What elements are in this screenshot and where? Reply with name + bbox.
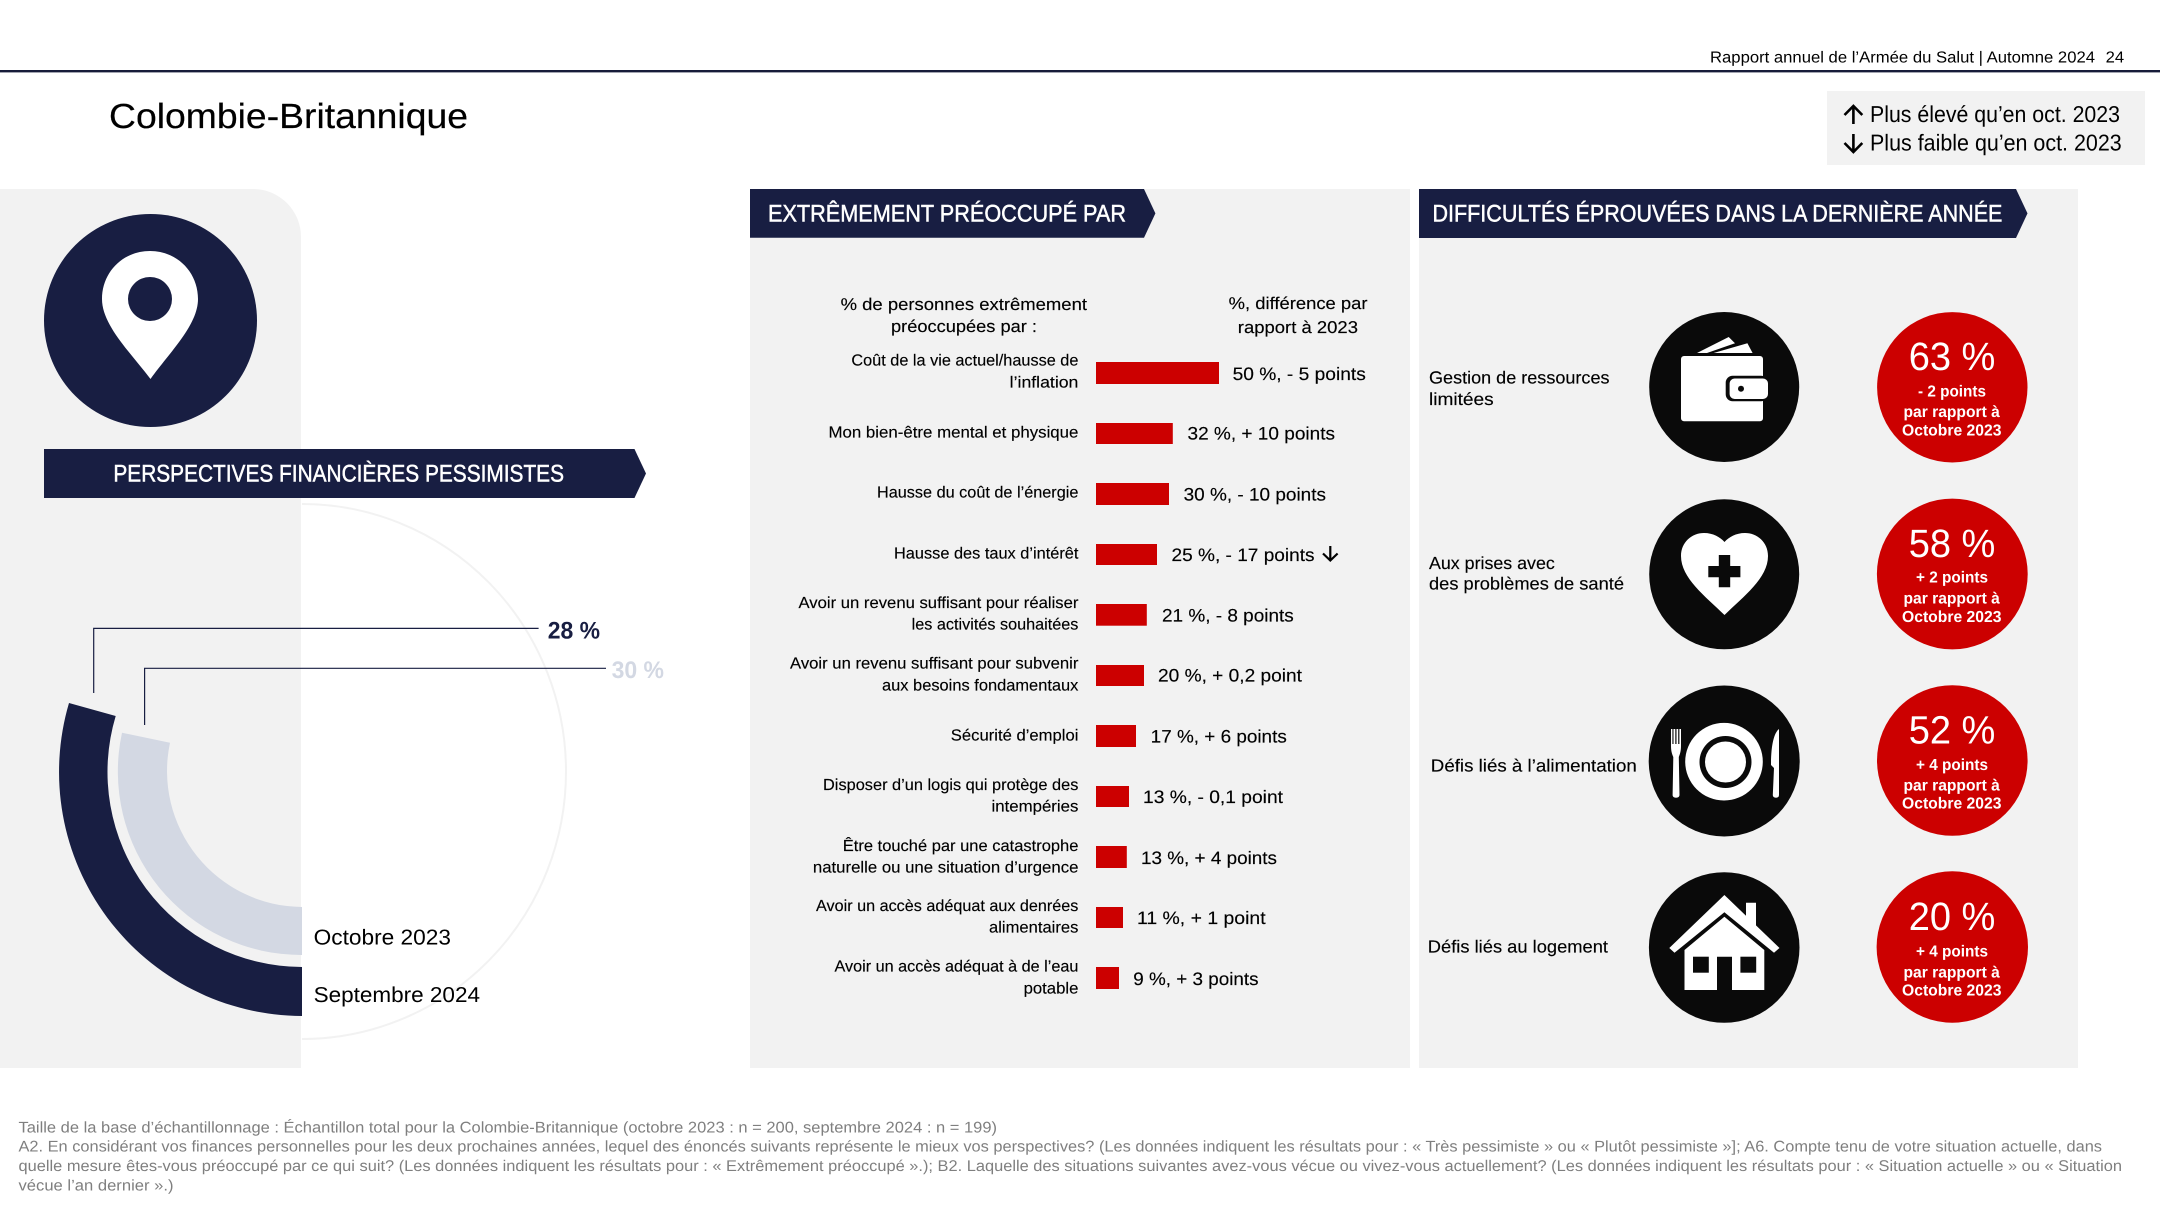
row: problemes de sante: Aux prises avec <box>1429 553 1555 573</box>
stat: 52 %: par rapport à <box>1904 778 2000 795</box>
row: catastrophe <box>813 837 1277 877</box>
chart: half donut comparison: 30 % <box>612 657 664 684</box>
row: eau potable: potable <box>1024 980 1078 997</box>
row: logis <box>823 777 1283 816</box>
stat: 20 %: + 4 points <box>1916 944 1988 961</box>
panel: perspectives financieres pessimistes <box>0 189 664 1068</box>
row: cout de l'energie: Hausse du coût de l’énergie <box>877 484 1078 501</box>
panel: difficultes eprouvees <box>1419 189 2078 1068</box>
row: taux d'interet: 25 %, - 17 points <box>1172 545 1315 565</box>
footnote: sample base and question wording: quelle mesure êtes-vous préoccupé par ce qui suit? (Les données indiquent les résultats pour : « Extrêmement préoccupé ».); B2. Laquelle des situations suivantes avez-vous vécue ou vivez-vous actuellement? (Les données indiquent les résultats pour : « Situation actuelle » ou « Situation <box>18 1158 2122 1175</box>
legend: arrows <box>1827 91 2145 165</box>
row: catastrophe: naturelle ou une situation d’urgence <box>813 860 1079 877</box>
stat: 63 % <box>1877 312 2028 462</box>
stat: 63 %: - 2 points <box>1918 384 1986 401</box>
footnote: sample base and question wording: vécue l’an dernier ».) <box>18 1178 174 1195</box>
row: bien-etre <box>828 423 1335 444</box>
stat: 58 % <box>1877 499 2028 649</box>
footnote: sample base and question wording <box>18 1119 2122 1195</box>
chart: half donut comparison: Octobre 2023 <box>314 926 451 950</box>
row: activites souhaitees <box>798 595 1294 633</box>
row: defis alimentation: Défis liés à l’alimentation <box>1431 756 1637 776</box>
icon: plate and cutlery <box>1649 686 1800 836</box>
chart: half donut comparison: 28 % <box>548 618 600 645</box>
row: besoins fondamentaux: 20 %, + 0,2 point <box>1158 666 1302 686</box>
row: logis: intempéries <box>992 799 1078 816</box>
icon: heart with cross <box>1649 499 1799 649</box>
stat: 63 %: 63 % <box>1909 335 1995 379</box>
heading: difficultes eprouvees: DIFFICULTÉS ÉPROUVÉES DANS LA DERNIÈRE ANNÉE <box>1432 201 2002 228</box>
icon: wallet <box>1649 312 1799 462</box>
row: denrees alimentaires <box>816 898 1266 936</box>
column header: difference from 2023: %, différence par <box>1229 294 1368 313</box>
stat: 20 %: Octobre 2023 <box>1902 983 2002 1000</box>
row: besoins fondamentaux: aux besoins fondamentaux <box>882 677 1078 694</box>
row: gestion de ressources limitees: limitées <box>1429 389 1494 409</box>
row: logis: 13 %, - 0,1 point <box>1143 787 1283 807</box>
legend: arrows: Plus faible qu’en oct. 2023 <box>1870 130 2122 156</box>
heading: difficultes eprouvees <box>1419 189 2028 238</box>
row: bien-etre: Mon bien-être mental et physique <box>828 424 1079 441</box>
row: cout de la vie: Coût de la vie actuel/hausse de <box>851 353 1078 370</box>
stat: 20 % <box>1877 871 2028 1023</box>
footnote: sample base and question wording: Taille de la base d’échantillonnage : Échantillon total pour la Colombie-Britannique (octobre 2023 : n = 200, septembre 2024 : n = 199) <box>18 1119 997 1137</box>
bar chart: extreme concerns <box>790 353 1366 997</box>
row: eau potable <box>834 958 1259 997</box>
row: cout de la vie: l’inflation <box>1010 374 1078 391</box>
row: defis logement <box>1428 871 2028 1023</box>
row: eau potable: 9 %, + 3 points <box>1133 969 1259 989</box>
footnote: sample base and question wording: A2. En considérant vos finances personnelles pour les deux prochaines années, lequel des énoncés suivants représente le mieux vos perspectives? (Les données indiquent les résultats pour : « Très pessimiste » ou « Plutôt pessimiste »]; A6. Compte tenu de votre situation actuelle, dans <box>18 1139 2102 1156</box>
row: cout de la vie <box>851 353 1366 391</box>
stat: 52 %: 52 % <box>1909 708 1995 752</box>
row: bien-etre: 32 %, + 10 points <box>1188 424 1335 444</box>
row: activites souhaitees: Avoir un revenu suffisant pour réaliser <box>798 595 1079 612</box>
row: denrees alimentaires: alimentaires <box>989 920 1078 936</box>
running header: report name and page number: Rapport annuel de l’Armée du Salut | Automne 2024 <box>1710 50 2095 67</box>
row: problemes de sante <box>1429 499 2028 649</box>
row: defis logement: Défis liés au logement <box>1428 937 1608 957</box>
chart: half donut comparison: Septembre 2024 <box>314 983 480 1007</box>
row: problemes de sante: des problèmes de santé <box>1429 573 1624 593</box>
heading: perspectives financieres pessimistes <box>44 449 646 498</box>
row: activites souhaitees: 21 %, - 8 points <box>1162 606 1294 626</box>
legend: arrows: Plus élevé qu’en oct. 2023 <box>1870 101 2120 127</box>
row: catastrophe: 13 %, + 4 points <box>1141 848 1277 868</box>
column header: share of respondents: % de personnes extrêmement <box>841 295 1087 314</box>
stat: 63 %: Octobre 2023 <box>1902 423 2002 440</box>
panel: extremement preoccupe par <box>750 189 1410 1068</box>
row: gestion de ressources limitees: Gestion de ressources <box>1429 367 1610 387</box>
running header: report name and page number: 24 <box>2106 50 2124 67</box>
row: cout de l'energie: 30 %, - 10 points <box>1184 484 1326 504</box>
chart: half donut comparison <box>59 618 664 1016</box>
row: activites souhaitees: les activités souhaitées <box>912 616 1078 633</box>
row: taux d'interet: Hausse des taux d’intérêt <box>894 546 1079 562</box>
row: securite d'emploi <box>951 725 1287 747</box>
row: securite d'emploi: Sécurité d’emploi <box>951 728 1078 745</box>
row: logis: Disposer d’un logis qui protège des <box>823 777 1078 794</box>
heading: extremement preoccupe par <box>750 189 1155 238</box>
row: gestion de ressources limitees <box>1429 312 2028 462</box>
stat: 52 %: + 4 points <box>1916 757 1988 774</box>
stat: 58 %: + 2 points <box>1916 570 1988 587</box>
column header: share of respondents <box>841 295 1087 336</box>
row: denrees alimentaires: 11 %, + 1 point <box>1137 908 1266 928</box>
heading: extremement preoccupe par: EXTRÊMEMENT PRÉOCCUPÉ PAR <box>768 201 1126 228</box>
row: cout de l'energie <box>877 483 1326 505</box>
row: denrees alimentaires: Avoir un accès adéquat aux denrées <box>816 898 1078 915</box>
stat: 63 %: par rapport à <box>1904 404 2000 421</box>
icon: location pin <box>44 214 257 427</box>
row: eau potable: Avoir un accès adéquat à de l’eau <box>834 958 1078 976</box>
title: Colombie-Britannique <box>109 97 468 136</box>
column header: share of respondents: préoccupées par : <box>891 317 1037 336</box>
stat: 58 %: par rapport à <box>1904 590 2000 607</box>
stat: 52 % <box>1877 685 2028 836</box>
stat: 20 %: par rapport à <box>1904 964 2000 981</box>
row: catastrophe: Être touché par une catastrophe <box>843 837 1079 855</box>
row: securite d'emploi: 17 %, + 6 points <box>1151 727 1287 747</box>
row: besoins fondamentaux <box>790 655 1302 694</box>
page header rule <box>0 70 2160 72</box>
stat: 52 %: Octobre 2023 <box>1902 795 2002 812</box>
row: besoins fondamentaux: Avoir un revenu suffisant pour subvenir <box>790 655 1079 672</box>
column header: difference from 2023 <box>1229 294 1368 337</box>
stat: 58 %: 58 % <box>1909 522 1995 566</box>
heading: perspectives financieres pessimistes: PERSPECTIVES FINANCIÈRES PESSIMISTES <box>113 461 564 488</box>
row: defis alimentation <box>1431 685 2028 836</box>
row: taux d'interet <box>894 544 1338 565</box>
column header: difference from 2023: rapport à 2023 <box>1238 318 1358 337</box>
stat: 20 %: 20 % <box>1909 895 1995 939</box>
stat: 58 %: Octobre 2023 <box>1902 609 2002 626</box>
icon: house <box>1649 872 1799 1023</box>
row: cout de la vie: 50 %, - 5 points <box>1233 364 1366 384</box>
